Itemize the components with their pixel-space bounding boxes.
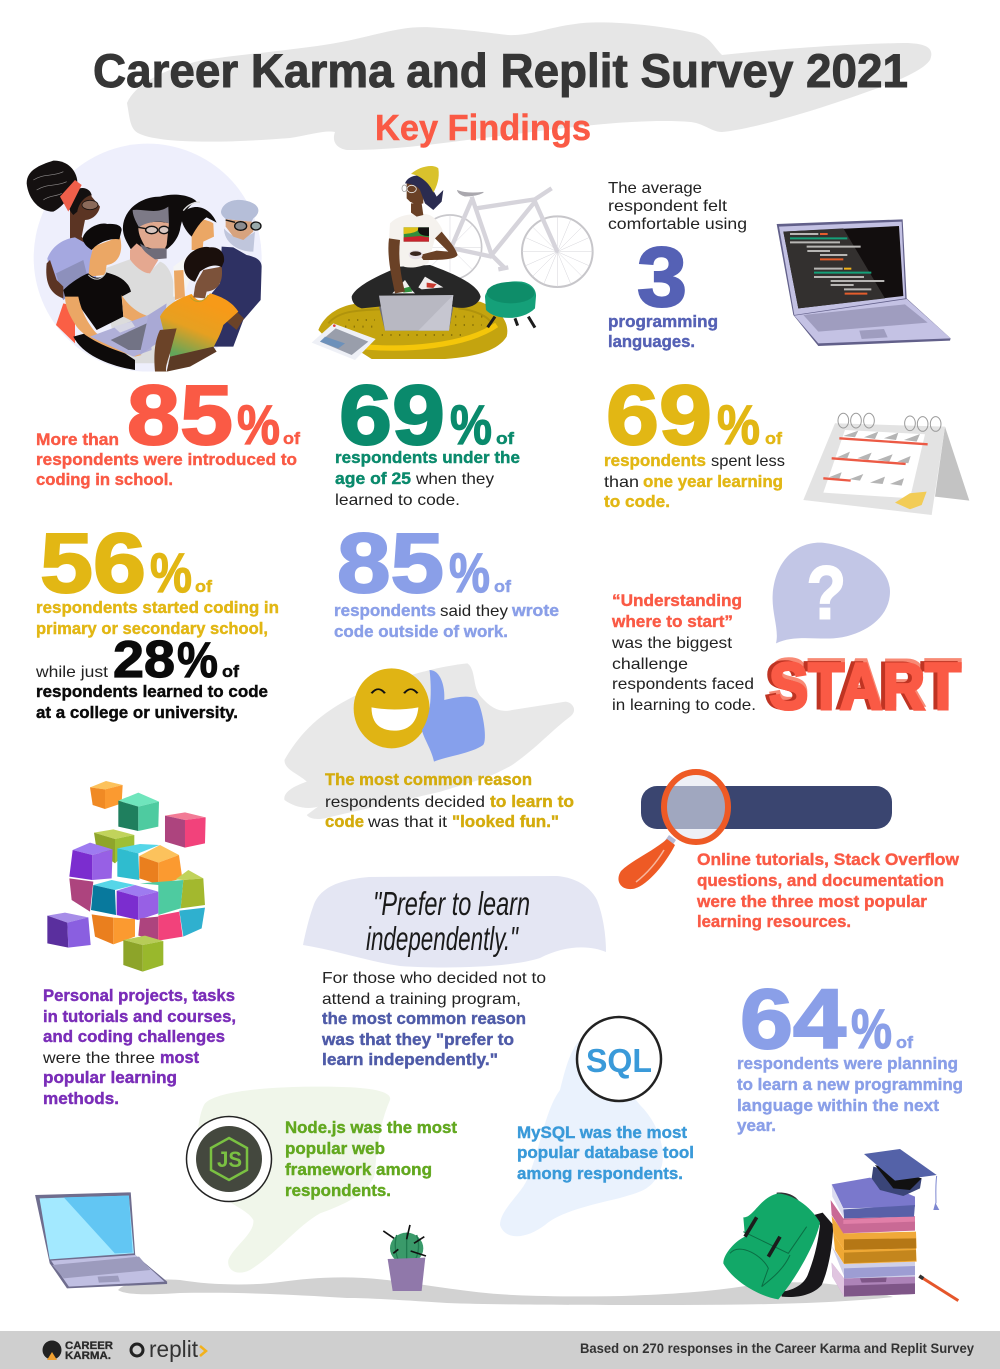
stat: 85% introduced in school: % [237, 393, 280, 456]
logo: Career Karma: KARMA. [65, 1350, 111, 1362]
text: looked fun: "looked fun." [452, 813, 559, 831]
text: Node.js: popular web [285, 1140, 385, 1158]
stat: 28% college or university: at a college or university. [36, 704, 238, 722]
laptop [379, 295, 453, 331]
bicycle [418, 188, 593, 287]
text: understanding where to start: in learning to code. [612, 697, 756, 714]
stat: 69% less than one year: % [717, 393, 760, 456]
background blob: title [127, 22, 931, 150]
text: MySQL: among respondents. [517, 1165, 683, 1183]
background blob: pale blue [500, 1040, 663, 1236]
stat: 3 programming languages: programming [608, 313, 718, 331]
stool [485, 281, 536, 328]
icon: desk calendar [803, 413, 969, 515]
stat: 85% wrote code outside of work [334, 516, 559, 641]
stat: 28% college or university: % [177, 632, 218, 688]
text: learning methods: and coding challenges [43, 1028, 225, 1046]
icon: question speech bubble: ? [807, 551, 846, 635]
footer source note: Based on 270 responses in the Career Karma and Replit Survey [580, 1341, 974, 1356]
stat: 85% wrote code outside of work: code outside of work. [334, 623, 508, 641]
text: training program: attend a training program, [322, 991, 521, 1008]
stat: 56% primary or secondary school [36, 516, 279, 638]
icon: backpack and books [723, 1149, 958, 1301]
stat: 69% less than one year: 69 [606, 368, 712, 462]
logo: Career Karma [42, 1340, 113, 1362]
icon: cactus [383, 1225, 426, 1291]
stat: 56% primary or secondary school: respondents started coding in [36, 599, 279, 617]
text: looked fun: to learn to [490, 793, 574, 811]
stat: 85% introduced in school: More than [36, 431, 119, 449]
pencil [919, 1276, 958, 1301]
stat: 85% introduced in school: of [283, 429, 300, 448]
background blob: gray brush behind smiley [284, 663, 574, 819]
text: three languages intro [608, 180, 747, 233]
text: looked fun: was that it [367, 814, 448, 831]
text: looked fun [325, 771, 574, 831]
stat: 64% new programming language: to learn a new programming [737, 1076, 963, 1094]
stat: 69% less than one year: respondents [604, 452, 706, 470]
books [831, 1178, 917, 1297]
text: Node.js: respondents. [285, 1182, 391, 1200]
stat: 64% new programming language: of [896, 1033, 913, 1052]
text: training program: was that they "prefer to [321, 1031, 514, 1049]
text: online resources: learning resources. [697, 913, 851, 931]
stat: 85% introduced in school: 85 [127, 368, 233, 462]
stat: 85% wrote code outside of work: 85 [337, 516, 444, 610]
text: online resources: Online tutorials, Stack Overflow [697, 851, 959, 869]
text: training program: For those who decided not to [322, 970, 546, 987]
background blob: pale green [197, 1087, 390, 1273]
stat: 56% primary or secondary school: of [195, 577, 212, 596]
stat: 85% introduced in school: respondents were introduced to [36, 451, 297, 469]
stat: 28% college or university: while just [35, 664, 109, 681]
stat: 69% under 25: respondents under the [335, 449, 520, 467]
stat: 69% less than one year: of [765, 429, 782, 448]
stat: 69% under 25 [335, 368, 520, 509]
text: learning methods: Personal projects, tasks [43, 987, 235, 1005]
text: MySQL [517, 1124, 694, 1183]
text: understanding where to start: challenge [612, 656, 688, 673]
text: understanding where to start [611, 592, 756, 714]
text: online resources [696, 851, 959, 931]
logo: replit: replit [149, 1336, 199, 1362]
text: learning methods: were the three [42, 1050, 155, 1067]
stat: 69% under 25: age of 25 [335, 470, 411, 488]
footer bar [0, 1331, 1000, 1369]
text: looked fun: respondents decided [325, 794, 485, 811]
illustration: person sitting with bicycle [312, 166, 593, 360]
stat: 56% primary or secondary school: % [150, 541, 192, 604]
stat: 28% college or university [35, 631, 268, 722]
stat: 85% introduced in school: coding in school. [36, 471, 173, 489]
callout: quote bubble: independently." [366, 920, 519, 957]
text: three languages intro: comfortable using [608, 216, 747, 233]
text: looked fun: The most common reason [325, 771, 532, 789]
stat: 28% college or university: 28 [113, 631, 175, 689]
text: learning methods: in tutorials and courses, [43, 1008, 236, 1026]
subtitle: Key Findings [375, 107, 591, 148]
icon: START 3D word: START [769, 649, 961, 723]
text: three languages intro: The average [608, 180, 702, 197]
stat: 64% new programming language: respondents were planning [737, 1055, 958, 1073]
stat: 69% less than one year: than [604, 474, 639, 491]
stat: 3 programming languages: languages. [608, 333, 695, 351]
tablet [312, 323, 376, 360]
callout: quote bubble: "Prefer to learn [373, 885, 530, 922]
stat: 69% less than one year: one year learning [643, 473, 783, 491]
stat: 69% under 25: learned to code. [335, 492, 460, 509]
icon: SQL badge [577, 1017, 661, 1101]
icon: Node.js badge: JS [217, 1147, 242, 1172]
ground shadow [118, 1277, 893, 1305]
rug [318, 302, 507, 359]
text: online resources: questions, and documentation [697, 872, 944, 890]
stat: 69% under 25: of [496, 429, 514, 448]
text: Node.js: Node.js was the most [285, 1119, 458, 1137]
stat: 69% under 25: when they [415, 471, 494, 488]
stat: 85% introduced in school [36, 368, 300, 489]
stat: 64% new programming language: year. [737, 1117, 776, 1135]
text: understanding where to start: where to start” [611, 613, 733, 631]
text: training program [321, 970, 546, 1069]
stat: 64% new programming language: % [851, 997, 892, 1060]
icon: bottom left laptop [35, 1192, 167, 1288]
icon: colorful cubes [47, 781, 206, 972]
icon: smiley and thumbs up [354, 668, 485, 762]
icon: START 3D word: START [769, 645, 961, 719]
text: training program: learn independently." [322, 1051, 498, 1069]
text: understanding where to start: respondents faced [612, 676, 754, 693]
stat: 64% new programming language: 64 [740, 972, 846, 1066]
stat: 56% primary or secondary school: 56 [40, 516, 146, 610]
stat: 3 programming languages [608, 230, 718, 351]
text: learning methods: methods. [43, 1090, 119, 1108]
text: training program: the most common reason [322, 1010, 526, 1028]
text: understanding where to start: “Understanding [612, 592, 742, 610]
stat: 64% new programming language [737, 972, 963, 1135]
stat: 69% less than one year: spent less [711, 453, 785, 470]
icon: question speech bubble [773, 543, 890, 643]
text: looked fun: code [325, 813, 364, 831]
text: understanding where to start: was the biggest [611, 635, 733, 652]
logo: Career Karma: CAREER [65, 1340, 113, 1352]
stat: 85% wrote code outside of work: % [449, 541, 490, 604]
icon: SQL badge: SQL [586, 1042, 652, 1079]
text: learning methods: most [160, 1049, 199, 1067]
stat: 85% wrote code outside of work: of [494, 577, 511, 596]
stat: 56% primary or secondary school: primary or secondary school, [36, 620, 268, 638]
stat: 69% less than one year: to code. [604, 493, 670, 511]
stat: 64% new programming language: language within the next [737, 1097, 940, 1115]
backpack [723, 1193, 833, 1299]
stat: 69% under 25: 69 [339, 368, 445, 462]
icon: laptop with code [777, 219, 951, 346]
stat: 28% college or university: of [222, 662, 239, 681]
stat: 3 programming languages: 3 [637, 230, 687, 324]
icon: magnifying glass over search bar [618, 772, 892, 889]
stat: 85% wrote code outside of work: wrote [511, 602, 559, 620]
graduation cap [864, 1149, 939, 1210]
text: MySQL: MySQL was the most [517, 1124, 688, 1142]
text: online resources: were the three most popular [696, 893, 928, 911]
stat: 28% college or university: respondents learned to code [36, 683, 268, 701]
text: learning methods: popular learning [43, 1069, 177, 1087]
icon: START 3D word: START [765, 648, 957, 722]
person [352, 166, 481, 308]
illustration: group of people [27, 144, 262, 372]
text: Node.js [285, 1119, 458, 1200]
text: learning methods [42, 987, 236, 1108]
callout: quote bubble [303, 876, 606, 967]
stat: 69% under 25: % [450, 393, 492, 456]
text: MySQL: popular database tool [517, 1144, 694, 1162]
icon: Node.js badge [186, 1116, 272, 1202]
logo: replit [131, 1336, 206, 1362]
text: Node.js: framework among [285, 1161, 432, 1179]
title: Career Karma and Replit Survey 2021 [93, 44, 908, 97]
stat: 69% less than one year [604, 368, 785, 511]
stat: 85% wrote code outside of work: respondents [334, 602, 436, 620]
stat: 85% wrote code outside of work: said they [440, 603, 508, 620]
text: three languages intro: respondent felt [608, 198, 728, 215]
